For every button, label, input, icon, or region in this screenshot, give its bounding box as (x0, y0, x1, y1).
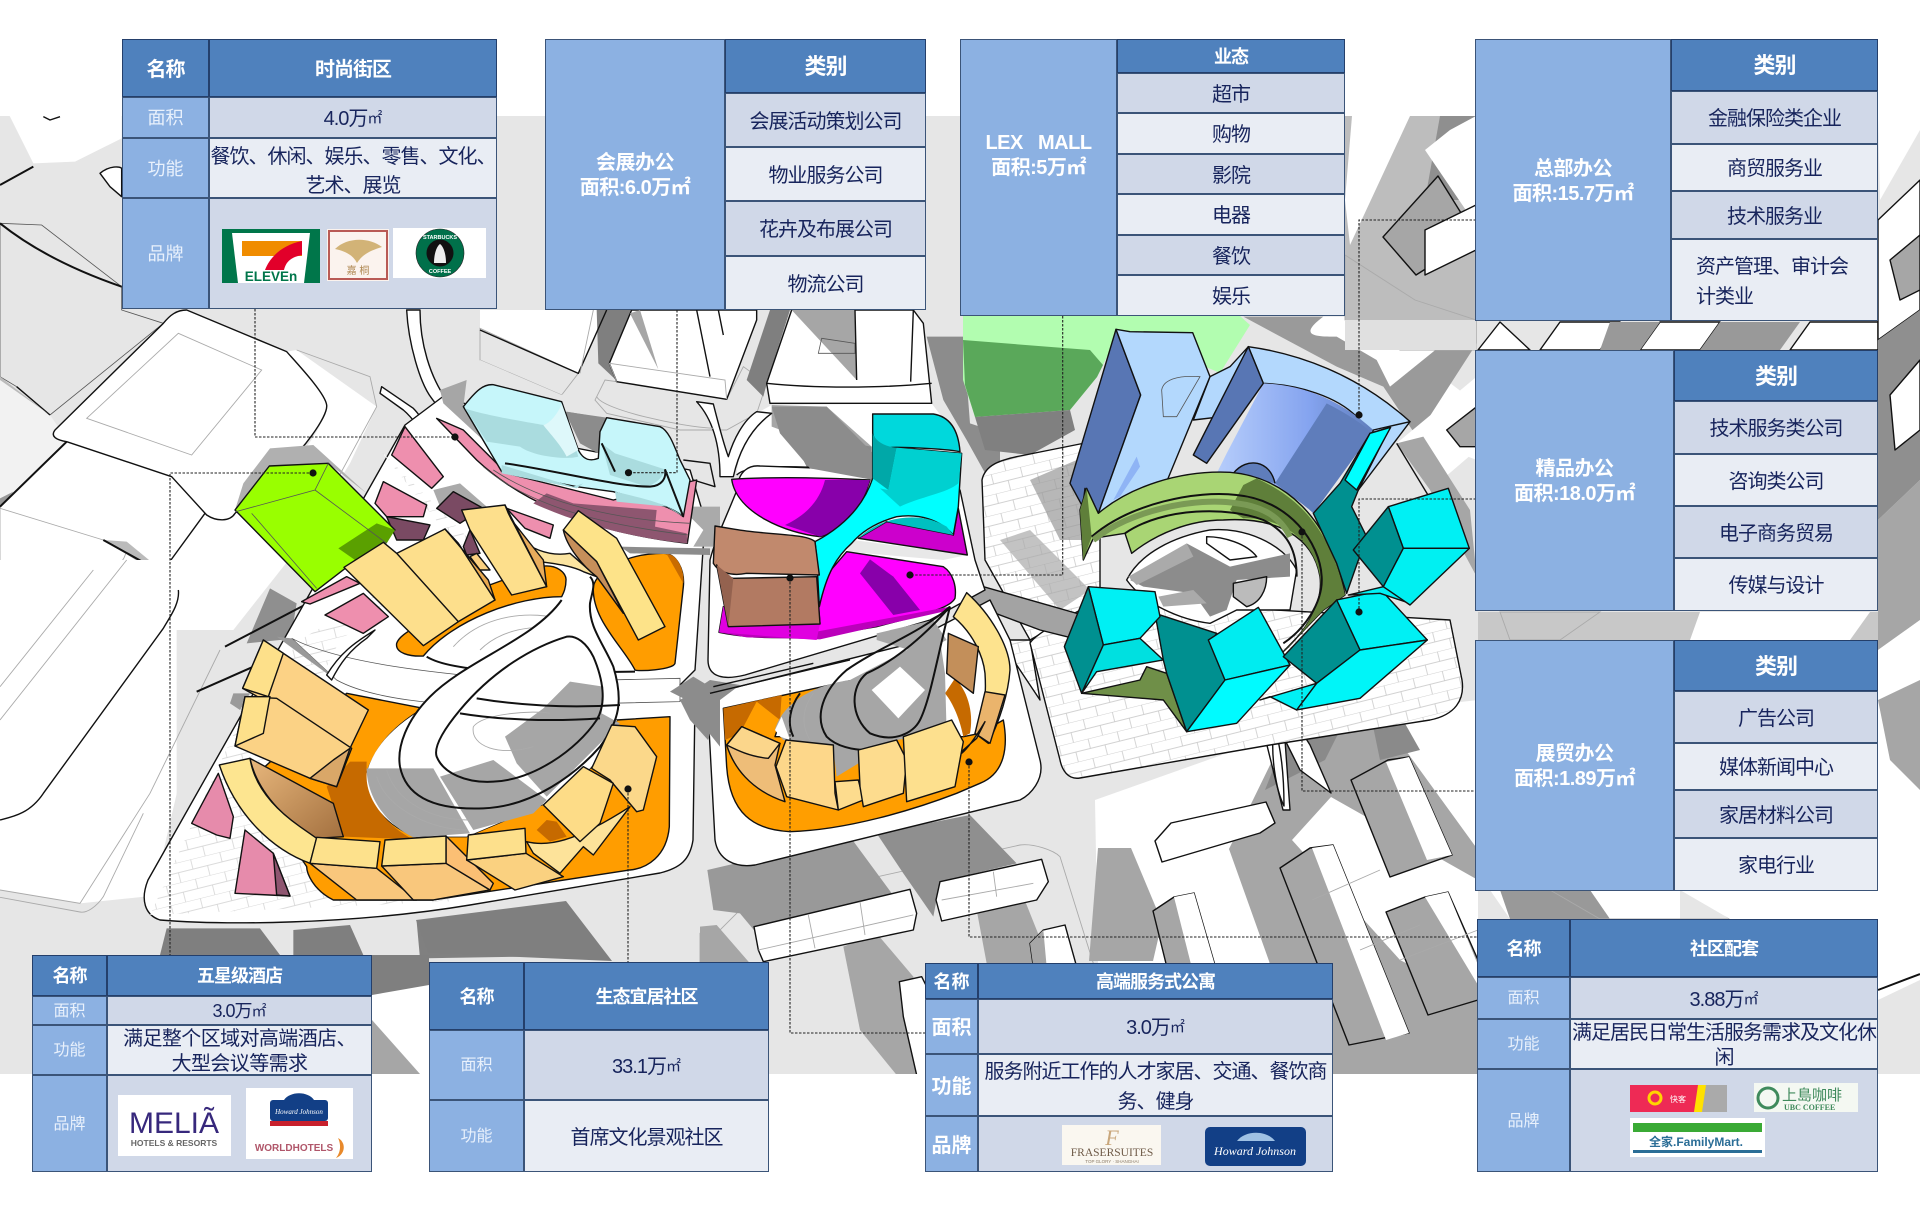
south east long buildings and shadows (1089, 697, 1478, 1074)
west white plots (0, 110, 377, 630)
logo: Melia: HOTELS & RESORTS (131, 1138, 218, 1148)
table: 五星级酒店: 名称 (52, 966, 86, 986)
table: LEX MALL: 电器 (1212, 205, 1250, 227)
logo: FamilyMart (1630, 1118, 1765, 1157)
logo: Fraser Suites (1062, 1125, 1161, 1165)
table: 社区配套: 功能 (1507, 1036, 1540, 1053)
table: 生态宜居社区: 生态宜居社区 (596, 987, 698, 1007)
table: 社区配套: 3.88万 (1690, 988, 1743, 1010)
building shadow (440, 380, 487, 443)
table: 总部办公: 资产管理、审计会计类业 (1696, 256, 1848, 308)
table: 社区配套: 面积 (1507, 990, 1540, 1007)
table: 精品办公: 类别 (1755, 364, 1797, 389)
logo: Howard Johnson Worldhotels: WORLDHOTELS (255, 1143, 333, 1154)
table: 高端服务式公寓: 3.0万 (1126, 1017, 1170, 1039)
road from centre to east (973, 586, 1078, 638)
table: 总部办公 (1475, 39, 1878, 321)
logo: Starbucks: COFFEE (429, 269, 451, 275)
table: 社区配套: 品牌 (1507, 1113, 1540, 1130)
table: 时尚街区: 品牌 (148, 244, 184, 264)
south west yellow buildings (219, 640, 657, 900)
table: 精品办公: 面积:18.0万㎡ (1514, 483, 1635, 505)
centre magenta podiums and towers (713, 407, 967, 640)
table: 会展办公: 物流公司 (788, 274, 864, 296)
table: 总部办公: 总部办公 (1534, 158, 1612, 180)
road below lawn (975, 410, 1075, 455)
logo: 嘉桐 (327, 229, 389, 281)
table: LEX MALL: LEX MALL 面积:5万㎡ (985, 132, 1092, 179)
table: 会展办公: 会展活动策划公司 (750, 110, 902, 132)
dark green lawn shadow (963, 340, 1103, 417)
table: 五星级酒店: 满足整个区域对高端酒店、 (123, 1028, 356, 1050)
table: 社区配套: 社区配套 (1690, 939, 1758, 959)
centre block plot (708, 466, 985, 677)
table: 五星级酒店: 大型会议等需求 (172, 1052, 307, 1074)
table: 总部办公: 金融保险类企业 (1708, 108, 1841, 130)
paving west (150, 450, 500, 915)
north centre white buildings (480, 310, 1000, 500)
table: 展贸办公 (1475, 640, 1878, 891)
table: 生态宜居社区: 功能 (460, 1128, 492, 1145)
table: 展贸办公: 家居材料公司 (1719, 804, 1833, 826)
table: LEX MALL: 娱乐 (1212, 286, 1250, 308)
logo: 快客 (1630, 1085, 1727, 1112)
east plaza plots (982, 440, 1100, 700)
table: 时尚街区: 面积 (148, 108, 184, 128)
orange plot south (250, 693, 670, 900)
table: 总部办公: 商贸服务业 (1727, 158, 1822, 180)
site map illustration (0, 116, 1920, 1074)
east blue headquarters towers (1070, 329, 1410, 513)
table: 高端服务式公寓: 面积 (932, 1017, 972, 1039)
logo: FamilyMart: 全家.FamilyMart. (1649, 1134, 1743, 1149)
west block road and orange plots (219, 380, 720, 900)
table: 五星级酒店: 功能 (53, 1042, 86, 1059)
table: 社区配套: ㎡ (1743, 991, 1758, 1008)
table: 时尚街区: 4.0万 (324, 108, 367, 130)
table: 时尚街区: ㎡ (367, 110, 382, 127)
south plaza (367, 705, 617, 837)
logo: 7-Eleven (222, 229, 320, 283)
green building shadow (235, 445, 367, 510)
logo: Starbucks: STARBUCKS (423, 235, 457, 241)
small pink retail blocks (302, 427, 553, 633)
logo: Howard Johnson (1205, 1127, 1306, 1166)
table: 时尚街区: 名称 (146, 58, 184, 80)
south road shadow (416, 901, 612, 961)
cross shadow (670, 677, 720, 747)
table: LEX MALL: 超市 (1212, 84, 1250, 106)
table: LEX MALL: 购物 (1212, 124, 1250, 146)
logo: Fraser Suites: F (1104, 1125, 1119, 1150)
logo: Starbucks (393, 228, 486, 278)
table: LEX MALL (960, 39, 1345, 316)
table: 展贸办公: 媒体新闻中心 (1719, 757, 1833, 779)
table: 展贸办公: 广告公司 (1738, 708, 1814, 730)
orange plot north left (397, 566, 566, 656)
shopping road bar (620, 547, 710, 555)
table: 生态宜居社区: 33.1万 (612, 1056, 666, 1078)
table: 生态宜居社区: 面积 (460, 1057, 492, 1074)
logo: 上岛咖啡 (1754, 1083, 1858, 1112)
table: 五星级酒店: ㎡ (252, 1003, 267, 1020)
bottom gap fill between tables (372, 965, 429, 1074)
table: 高端服务式公寓 (925, 963, 1333, 1172)
table: 展贸办公: 展贸办公 (1536, 743, 1614, 765)
logo: 上岛咖啡: UBC COFFEE (1784, 1103, 1835, 1112)
table: 社区配套 (1477, 919, 1878, 1172)
north east buildings (1345, 116, 1878, 919)
table: 五星级酒店: 面积 (53, 1003, 86, 1020)
logo: 嘉桐: 嘉 桐 (347, 264, 369, 277)
road junction shadow (680, 680, 740, 740)
pink podium (437, 418, 697, 543)
east cyan office cubes (1064, 427, 1469, 732)
logo: Howard Johnson Worldhotels: Howard Johnson (274, 1108, 323, 1116)
map background (0, 110, 1920, 1075)
east green ring building (1080, 472, 1345, 652)
table: 高端服务式公寓: 高端服务式公寓 (1096, 972, 1215, 992)
table: 会展办公: 面积:6.0万㎡ (580, 177, 690, 199)
table: LEX MALL: 餐饮 (1212, 246, 1250, 268)
table: 会展办公: 物业服务公司 (768, 164, 882, 186)
table: 生态宜居社区: ㎡ (666, 1058, 681, 1075)
far right edge buildings (1878, 116, 1920, 1074)
logo: Fraser Suites: TOP GLORY · SHANGHAI (1085, 1159, 1139, 1164)
logo: Melia: MELIÃ (129, 1106, 219, 1140)
orange plot north right (593, 553, 684, 671)
table: 五星级酒店: 五星级酒店 (197, 966, 282, 986)
table: LEX MALL: 影院 (1212, 164, 1250, 186)
table: 精品办公: 咨询类公司 (1728, 470, 1824, 492)
logo: Howard Johnson Worldhotels (246, 1088, 353, 1159)
logo: 快客: 快客 (1670, 1094, 1686, 1104)
table: 展贸办公: 家电行业 (1738, 855, 1814, 877)
south east block plot (708, 600, 1041, 866)
table: 会展办公: 会展办公 (596, 152, 674, 174)
table: 总部办公: 面积:15.7万㎡ (1512, 182, 1634, 204)
west pink blocks (192, 773, 290, 896)
table: 高端服务式公寓: ㎡ (1170, 1019, 1185, 1036)
ribbon and plaza shadows (367, 570, 620, 837)
table: 会展办公: 花卉及布展公司 (759, 219, 892, 241)
table: 时尚街区: 功能 (148, 159, 184, 179)
table: 社区配套: 名称 (1506, 939, 1540, 959)
table: 展贸办公: 类别 (1755, 654, 1797, 679)
table: 五星级酒店: 品牌 (53, 1116, 86, 1133)
table: 会展办公: 类别 (804, 54, 846, 79)
table: 总部办公: 技术服务业 (1727, 206, 1822, 228)
green lawn (963, 316, 1250, 417)
north yellow buildings (344, 505, 665, 646)
table: 精品办公: 电子商务贸易 (1719, 522, 1833, 544)
table: 生态宜居社区: 首席文化景观社区 (570, 1126, 722, 1148)
east roads and shadows (1244, 316, 1477, 574)
logo: Howard Johnson: Howard Johnson (1213, 1144, 1296, 1158)
table: 总部办公: 类别 (1753, 53, 1796, 78)
office light cyan building (463, 385, 690, 517)
table: 精品办公 (1475, 350, 1878, 611)
table: 高端服务式公寓: 功能 (932, 1076, 972, 1098)
table: 时尚街区 (122, 39, 497, 309)
west block plot (144, 395, 705, 923)
table: 精品办公: 技术服务类公司 (1710, 418, 1842, 440)
leader lines and dots (170, 220, 1478, 1033)
table: 五星级酒店: 3.0万 (212, 1001, 252, 1021)
table: 社区配套: 满足居民日常生活服务需求及文化休闲 (1572, 1022, 1876, 1068)
logo: 上岛咖啡: 上島咖啡 (1782, 1087, 1842, 1104)
table: LEX MALL: 业态 (1214, 47, 1248, 67)
north west curved road (379, 309, 442, 420)
table: 高端服务式公寓: 名称 (934, 972, 970, 992)
table: 时尚街区: 时尚街区 (315, 58, 391, 80)
table: 展贸办公: 面积:1.89万㎡ (1514, 768, 1635, 790)
table: 精品办公: 传媒与设计 (1728, 575, 1824, 597)
logo: Fraser Suites: FRASERSUITES (1071, 1147, 1153, 1159)
road west crossing (327, 630, 375, 680)
table: 生态宜居社区 (429, 962, 769, 1172)
table: 时尚街区: 餐饮、休闲、娱乐、零售、文化、艺术、展览 (210, 146, 496, 197)
table: 生态宜居社区: 名称 (460, 987, 494, 1007)
north plaza rings (427, 615, 635, 672)
five star hotel green building (235, 463, 395, 592)
south east yellow buildings (727, 593, 1010, 810)
south east plot orange and plaza (710, 607, 1005, 832)
south east plots and shadows (700, 815, 1133, 1075)
table: 精品办公: 精品办公 (1536, 458, 1614, 480)
table: 会展办公 (545, 39, 926, 310)
south west plot (0, 560, 520, 958)
logo: Melia (118, 1095, 231, 1156)
table: 五星级酒店 (32, 955, 372, 1172)
table: 高端服务式公寓: 服务附近工作的人才家居、交通、餐饮商务、健身 (984, 1060, 1326, 1112)
table: 高端服务式公寓: 品牌 (932, 1134, 972, 1156)
